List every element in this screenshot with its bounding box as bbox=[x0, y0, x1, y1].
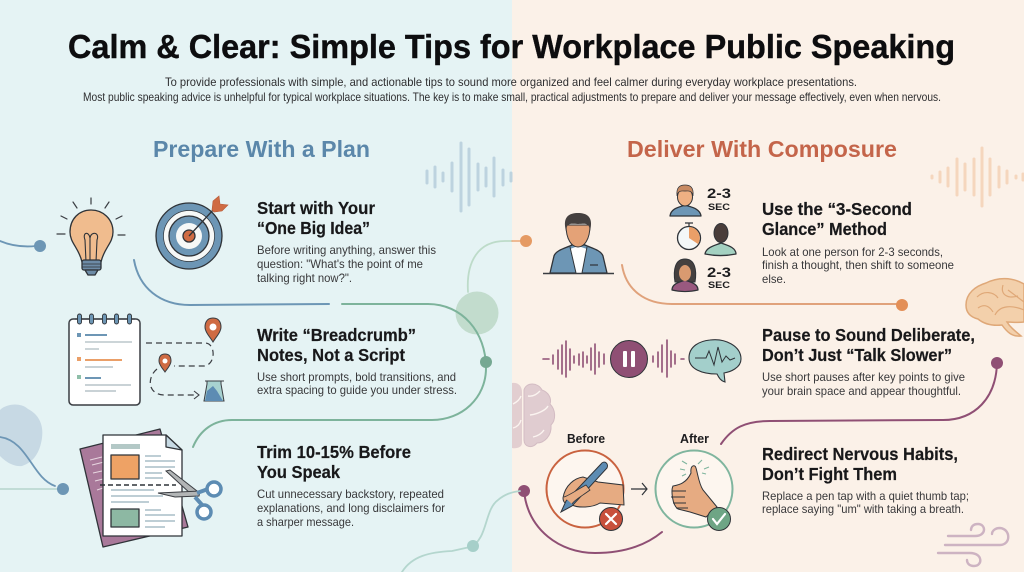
intro text bbox=[83, 75, 941, 104]
tip 2 text: Write Breadcrumb Notes: Write “Breadcrumb” bbox=[257, 325, 416, 345]
tip 6 text: Redirect Nervous Habits: Replace a pen tap with a quiet thumb tap; bbox=[762, 489, 969, 503]
connector: green blob and branch bbox=[456, 235, 532, 334]
icon: after thumbs up bbox=[656, 450, 732, 530]
connector: blue wave to dot bbox=[0, 437, 69, 495]
tip 2 text: Write Breadcrumb Notes: Use short prompts, bold transitions, and bbox=[257, 370, 456, 384]
connector: purple upper curve bbox=[721, 357, 1003, 444]
panel: right background bbox=[512, 0, 1024, 572]
label: 2-3 sec first bbox=[707, 186, 732, 213]
connector: blue curve under first tip bbox=[134, 260, 329, 305]
tip 6 text: Redirect Nervous Habits: Don’t Fight Them bbox=[762, 464, 897, 484]
arrow before to after bbox=[631, 483, 647, 495]
tip 5 text: Pause to Sound Deliberate: Pause to Sound Deliberate, bbox=[762, 325, 975, 345]
tip 2 text: Write Breadcrumb Notes: Notes, Not a Script bbox=[257, 345, 405, 365]
tip 4 text: 3-Second Glance: finish a thought, then shift to someone bbox=[762, 258, 954, 272]
icon: before hand with pen bbox=[546, 450, 624, 530]
tip 2 text: Write Breadcrumb Notes: extra spacing to guide you under stress. bbox=[257, 383, 457, 397]
tip 4 text: 3-Second Glance: Look at one person for 2-3 seconds, bbox=[762, 245, 943, 259]
label: 2-3 sec first: SEC bbox=[708, 202, 730, 213]
icon: documents and scissors bbox=[80, 429, 221, 547]
icon: speaker person bbox=[543, 213, 614, 274]
icon: sound wave right bbox=[932, 148, 1023, 206]
title: Calm & Clear: Simple Tips for Workplace Public Speaking bbox=[68, 28, 955, 65]
icon: light bulb bbox=[57, 198, 125, 275]
label: 2-3 sec second: SEC bbox=[708, 280, 730, 291]
tip 1 text: Start with Your One Big Idea: Before writing anything, answer this bbox=[257, 243, 436, 257]
icon: person 3 bbox=[672, 259, 698, 292]
tip 3 text: Trim 10-15%: a sharper message. bbox=[257, 515, 354, 529]
heading: Deliver With Composure: Deliver With Composure bbox=[627, 136, 897, 162]
tip 4 text: 3-Second Glance: Glance” Method bbox=[762, 219, 887, 239]
icon: big brain bbox=[966, 279, 1024, 336]
tip 2 text: Write Breadcrumb Notes bbox=[257, 325, 457, 397]
icon: dashed route with pins bbox=[146, 318, 224, 401]
tip 1 text: Start with Your One Big Idea: “One Big Idea” bbox=[257, 218, 370, 238]
tip 4 text: 3-Second Glance: else. bbox=[762, 272, 786, 286]
tip 3 text: Trim 10-15%: explanations, and long disclaimers for bbox=[257, 501, 445, 515]
tip 3 text: Trim 10-15%: You Speak bbox=[257, 462, 340, 482]
tip 5 text: Pause to Sound Deliberate: your brain space and appear thoughtful. bbox=[762, 384, 961, 398]
icon: person 2 bbox=[705, 224, 736, 256]
icon: notebook bbox=[69, 314, 140, 405]
tip 6 text: Redirect Nervous Habits: Redirect Nervous Habits, bbox=[762, 444, 958, 464]
tip 6 text: Redirect Nervous Habits bbox=[762, 444, 969, 516]
intro text: To provide professionals with simple, and actionable tips to sound more organized and feel calmer during everyday workplace presentations. bbox=[165, 75, 857, 89]
heading: Prepare With a Plan: Prepare With a Plan bbox=[153, 136, 370, 162]
tip 3 text: Trim 10-15%: Trim 10-15% Before bbox=[257, 442, 411, 462]
label: 2-3 sec first: 2-3 bbox=[707, 186, 732, 201]
connector: green loop bbox=[193, 304, 492, 447]
icon: wave with pause and teal brain bbox=[543, 340, 741, 382]
icon: sound wave left bbox=[427, 143, 511, 211]
tip 3 text: Trim 10-15%: Cut unnecessary backstory, repeated bbox=[257, 487, 444, 501]
tip 4 text: 3-Second Glance bbox=[762, 199, 954, 286]
tip 1 text: Start with Your One Big Idea: talking right now?". bbox=[257, 271, 352, 285]
tip 1 text: Start with Your One Big Idea: question: "What's the point of me bbox=[257, 257, 423, 271]
before label: Before bbox=[567, 432, 605, 446]
tip 1 text: Start with Your One Big Idea bbox=[257, 198, 436, 285]
connector: purple lower curve bbox=[518, 485, 662, 553]
icon: person 1 bbox=[670, 185, 701, 216]
tip 5 text: Pause to Sound Deliberate bbox=[762, 325, 975, 398]
tip 6 text: Redirect Nervous Habits: replace saying "um" with taking a breath. bbox=[762, 502, 964, 516]
icon: stopwatch bbox=[678, 223, 700, 250]
icon: target with dart bbox=[156, 196, 228, 269]
label: 2-3 sec second bbox=[707, 265, 732, 291]
connector: blue dot by bulb bbox=[0, 240, 46, 252]
decorative blob left bbox=[0, 405, 42, 466]
after label: After bbox=[680, 432, 709, 446]
tip 4 text: 3-Second Glance: Use the “3-Second bbox=[762, 199, 912, 219]
connector: teal bottom curve bbox=[402, 491, 520, 572]
connector: orange curve bbox=[622, 265, 908, 311]
tip 1 text: Start with Your One Big Idea: Start with Your bbox=[257, 198, 375, 218]
tip 5 text: Pause to Sound Deliberate: Don’t Just “Talk Slower” bbox=[762, 345, 952, 365]
icon: pale brain centre bbox=[512, 383, 555, 448]
panel: left background bbox=[0, 0, 512, 572]
tip 5 text: Pause to Sound Deliberate: Use short pauses after key points to give bbox=[762, 370, 965, 384]
label: 2-3 sec second: 2-3 bbox=[707, 265, 732, 280]
icon: wind bbox=[938, 524, 1008, 566]
tip 3 text: Trim 10-15% bbox=[257, 442, 445, 529]
